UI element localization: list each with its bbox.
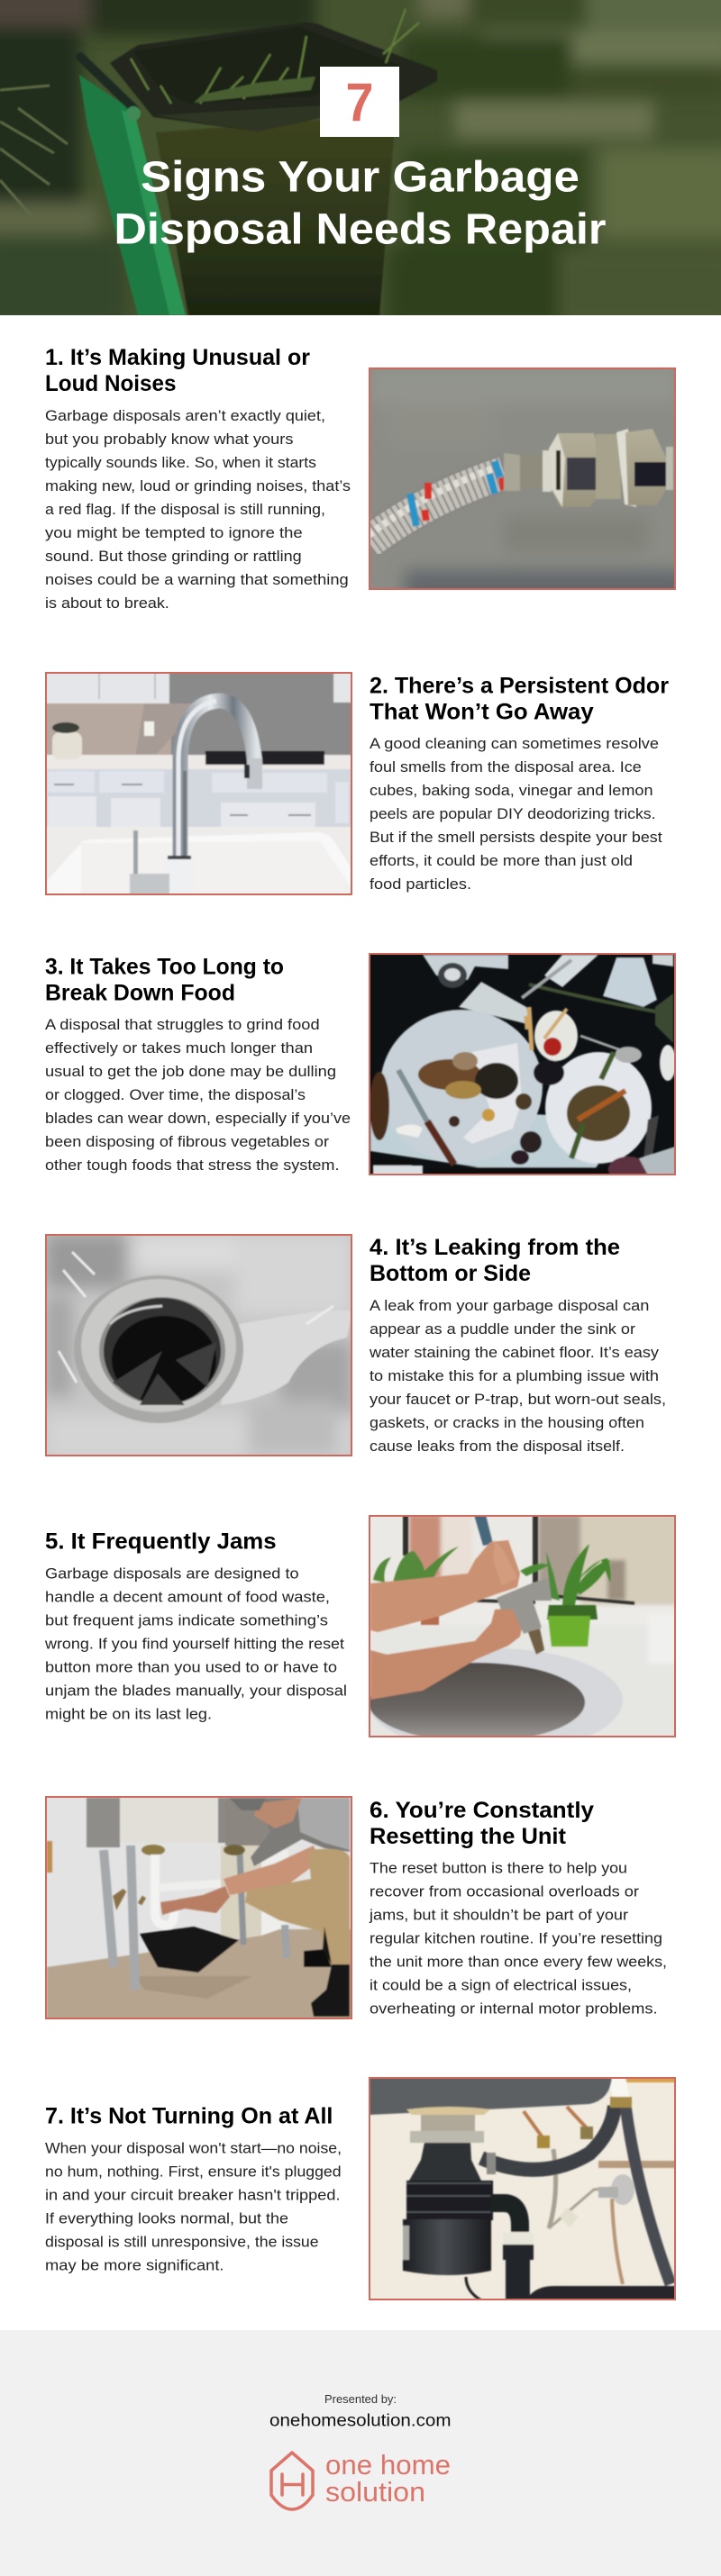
heading: sign 1: 1. It’s Making Unusual or: [45, 345, 310, 370]
body text: sign 3: usual to get the job done may be dulling: [45, 1063, 336, 1080]
body text: sign 4: appear as a puddle under the sink or: [370, 1320, 635, 1338]
heading: sign 5: 5. It Frequently Jams: [45, 1529, 277, 1555]
heading: sign 3: [45, 955, 284, 1005]
body text: sign 7: may be more significant.: [45, 2257, 224, 2273]
photo: sink drain with water: [45, 1234, 352, 1459]
body text: sign 1: you might be tempted to ignore the: [45, 524, 303, 541]
heading: sign 3: Break Down Food: [45, 980, 235, 1005]
body text: sign 5: [44, 1565, 347, 1722]
body text: sign 4: gaskets, or cracks in the housing often: [370, 1414, 644, 1431]
photo: garbage disposal unit under sink: [369, 2077, 676, 2300]
body text: sign 6: [369, 1859, 667, 2018]
panel: sign 4: [45, 1234, 666, 1459]
heading: sign 6: 6. You’re Constantly: [370, 1798, 594, 1823]
body text: sign 2: But if the smell persists despite your best: [370, 829, 662, 846]
body text: sign 3: blades can wear down, especially if you’ve: [45, 1110, 351, 1127]
body text: sign 2: peels are popular DIY deodorizing tricks.: [370, 805, 656, 822]
logo wordmark: one home: [325, 2449, 451, 2481]
heading: sign 4: [370, 1235, 620, 1286]
heading: sign 4: 4. It’s Leaking from the: [370, 1235, 620, 1260]
body text: sign 7: no hum, nothing. First, ensure it's plugged: [45, 2163, 342, 2180]
panel: footer: [0, 2330, 721, 2576]
photo: plumber fitting faucet on sink: [367, 1515, 676, 1753]
heading: sign 2: 2. There’s a Persistent Odor: [370, 674, 669, 699]
panel: sign 7: [45, 2077, 676, 2300]
website: onehomesolution.com: [269, 2410, 451, 2430]
body text: sign 1: a red flag. If the disposal is still running,: [45, 501, 325, 518]
body text: sign 5: handle a decent amount of food waste,: [45, 1589, 330, 1605]
body text: sign 4: cause leaks from the disposal itself.: [370, 1438, 625, 1455]
body text: sign 2: efforts, it could be more than just old: [370, 852, 633, 869]
body text: sign 4: your faucet or P-trap, but worn-out seals,: [370, 1391, 666, 1408]
photo: kitchen faucet: [45, 672, 352, 895]
body text: sign 6: jams, but it shouldn’t be part of your: [369, 1906, 628, 1924]
body text: sign 6: overheating or internal motor problems.: [370, 2000, 658, 2018]
logo: [271, 2449, 451, 2509]
body text: sign 4: to mistake this for a plumbing issue with: [370, 1367, 659, 1384]
body text: sign 2: cubes, baking soda, vinegar and lemon: [370, 782, 653, 799]
body text: sign 1: noises could be a warning that something: [45, 571, 349, 588]
photo: braided hose fitting: [369, 367, 693, 606]
heading: sign 2: That Won’t Go Away: [370, 699, 594, 724]
heading: sign 1: Loud Noises: [45, 371, 177, 396]
body text: sign 5: but frequent jams indicate something’s: [45, 1612, 328, 1628]
heading: sign 6: [370, 1798, 594, 1849]
title: Disposal Needs Repair: [114, 205, 606, 254]
body text: sign 7: When your disposal won't start—no noise,: [45, 2140, 342, 2156]
body text: sign 3: effectively or takes much longer than: [45, 1039, 313, 1057]
logo wordmark: [325, 2449, 451, 2508]
body text: sign 4: [369, 1297, 666, 1455]
body text: sign 6: recover from occasional overloads or: [370, 1882, 639, 1900]
body text: sign 5: Garbage disposals are designed to: [45, 1565, 299, 1582]
panel: sign 5: [44, 1515, 676, 1753]
body text: sign 4: A leak from your garbage disposal can: [370, 1297, 649, 1314]
body text: sign 1: making new, loud or grinding noises, that’s: [45, 477, 351, 494]
body text: sign 5: button more than you used to or have to: [45, 1659, 337, 1675]
panel: sign 1: [45, 345, 693, 612]
body text: sign 2: foul smells from the disposal area. Ice: [370, 758, 642, 776]
heading: sign 2: [370, 674, 669, 724]
bin lid: [79, 75, 184, 315]
body text: sign 5: might be on its last leg.: [45, 1706, 212, 1722]
body text: sign 2: A good cleaning can sometimes resolve: [370, 735, 659, 752]
heading: sign 7: 7. It’s Not Turning On at All: [45, 2104, 333, 2129]
body text: sign 3: A disposal that struggles to grind food: [45, 1016, 320, 1033]
panel: hero banner: [0, 0, 721, 329]
title: [114, 153, 606, 254]
body text: sign 7: If everything looks normal, but the: [45, 2210, 288, 2227]
body text: sign 1: [45, 407, 351, 612]
photo: dirty plates: [369, 953, 676, 1182]
body text: sign 6: it could be a sign of electrical issues,: [370, 1976, 632, 1994]
body text: sign 2: food particles.: [370, 875, 471, 893]
number badge: 7: [346, 72, 373, 132]
logo wordmark: solution: [325, 2476, 425, 2508]
rim: [110, 23, 437, 132]
title: Signs Your Garbage: [141, 153, 580, 202]
body text: sign 3: been disposing of fibrous vegetables or: [45, 1133, 329, 1150]
body text: sign 4: water staining the cabinet floor. It’s easy: [369, 1344, 660, 1361]
presented by label: Presented by:: [324, 2392, 397, 2406]
body text: sign 5: unjam the blades manually, your disposal: [45, 1683, 347, 1699]
icon: house hexagon with H: [271, 2453, 313, 2509]
body text: sign 1: Garbage disposals aren’t exactly quiet,: [45, 407, 325, 424]
body text: sign 1: is about to break.: [45, 594, 169, 612]
body text: sign 7: [45, 2140, 342, 2273]
body text: sign 6: The reset button is there to help you: [370, 1859, 627, 1877]
body text: sign 3: or clogged. Over time, the disposal’s: [45, 1086, 306, 1103]
heading: sign 6: Resetting the Unit: [370, 1824, 567, 1849]
panel: sign 3: [45, 953, 676, 1182]
body text: sign 3: [45, 1016, 351, 1174]
body text: sign 6: the unit more than once every few weeks,: [370, 1953, 667, 1971]
hero photo: green wheelie bin on lawn: [0, 0, 721, 315]
body text: sign 1: sound. But those grinding or rattling: [45, 548, 302, 565]
heading: sign 4: Bottom or Side: [370, 1261, 531, 1286]
body text: sign 2: [370, 735, 662, 893]
body text: sign 7: in and your circuit breaker hasn't tripped.: [45, 2187, 341, 2203]
panel: sign 6: [45, 1796, 667, 2019]
photo: technician under sink: [45, 1796, 352, 2019]
body text: sign 3: other tough foods that stress the system.: [45, 1156, 340, 1174]
number badge: [320, 67, 399, 137]
body text: sign 1: typically sounds like. So, when it starts: [45, 454, 316, 471]
body text: sign 6: regular kitchen routine. If you’re resetting: [370, 1929, 662, 1947]
heading: sign 3: 3. It Takes Too Long to: [45, 955, 284, 980]
bin body: [156, 114, 396, 315]
body text: sign 7: disposal is still unresponsive, the issue: [45, 2234, 319, 2250]
body text: sign 5: wrong. If you find yourself hitting the reset: [44, 1636, 344, 1652]
panel: sign 2: [45, 672, 669, 895]
heading: sign 1: [45, 345, 310, 396]
body text: sign 1: but you probably know what yours: [45, 431, 294, 448]
